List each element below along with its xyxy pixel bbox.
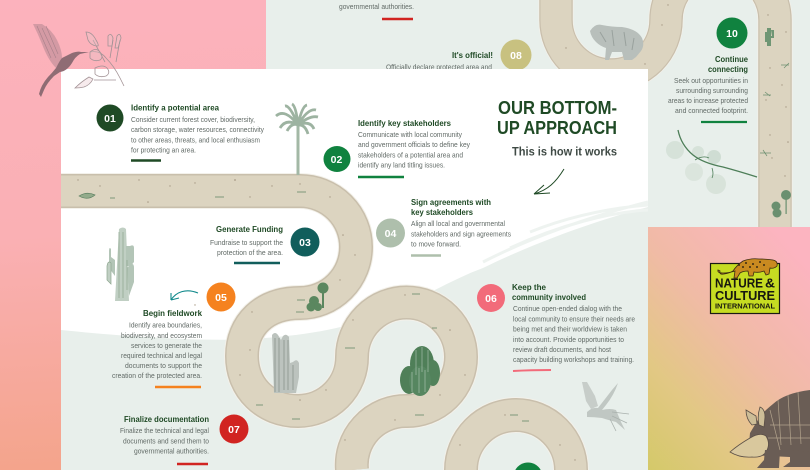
step 06: community involved xyxy=(512,293,586,302)
step 10: Seek out opportunities in xyxy=(674,76,748,85)
icon: small cactus on road xyxy=(765,28,774,46)
step 04 xyxy=(376,198,511,256)
icon: shrubs and tree xyxy=(306,282,328,312)
step 02: identify any land titling issues. xyxy=(358,160,445,170)
title xyxy=(498,101,616,134)
icon: flowers xyxy=(75,32,124,88)
step 10 xyxy=(668,18,749,122)
icon: hummingbird xyxy=(33,24,89,97)
subtitle: This is how it works xyxy=(512,146,617,158)
step 02: and government officials to define key xyxy=(358,140,470,149)
step 07 xyxy=(120,414,248,464)
step 06: Continue open-ended dialog with the xyxy=(513,304,622,313)
step 06: 06 xyxy=(485,293,497,305)
step 04: Align all local and governmental xyxy=(411,219,505,228)
winding road: back sheet xyxy=(556,0,789,228)
step 02: Identify key stakeholders xyxy=(358,119,452,128)
icon: flowering branch xyxy=(666,130,757,194)
icon: armadillo xyxy=(730,390,810,468)
arrow: to the road xyxy=(534,169,564,194)
step 05: Identify area boundaries, xyxy=(129,320,202,330)
step 03: 03 xyxy=(299,237,311,249)
step 05: documents to support the xyxy=(125,361,202,370)
step 07: documents and send them to xyxy=(123,436,209,446)
step 08: It's official! xyxy=(452,51,493,60)
step 07: 07 xyxy=(228,424,240,436)
step 01: to other areas, threats, and local enthusiasm xyxy=(131,135,260,144)
title: UP APPROACH xyxy=(497,118,617,138)
step 09 marker xyxy=(515,462,541,470)
step 05: 05 xyxy=(215,292,227,304)
step 10: and connected footprint. xyxy=(675,106,748,115)
step 10: connecting xyxy=(708,65,748,74)
step 02 xyxy=(324,119,470,177)
logo: Nature & Culture International: CULTURE xyxy=(715,288,775,303)
step 02: stakeholders of a potential area and xyxy=(358,150,463,160)
step 10: Continue xyxy=(715,55,749,64)
icon: shrubs and tree xyxy=(772,190,791,218)
step 03: protection of the area. xyxy=(217,248,283,257)
step 08 xyxy=(386,40,532,72)
road tufts xyxy=(79,192,529,421)
step 05: biodiversity, and ecosystem xyxy=(121,331,202,340)
step 07: governmental authorities. xyxy=(134,446,209,456)
step 04: Sign agreements with xyxy=(411,198,491,207)
step 02: Communicate with local community xyxy=(358,130,462,139)
panel: back sheet xyxy=(266,0,810,228)
step 04: to move forward. xyxy=(411,240,461,248)
step 10: surrounding surrounding xyxy=(676,86,748,95)
step 05: required technical and legal xyxy=(121,351,202,360)
panel: front sheet xyxy=(61,69,648,470)
step 06: capacity building workshops and training. xyxy=(513,355,634,364)
icon: palm tree xyxy=(276,104,318,175)
step 05: creation of the protected area. xyxy=(112,371,202,380)
step 01: carbon storage, water resources, connectivity xyxy=(131,125,264,134)
title: OUR BOTTOM- xyxy=(498,98,617,118)
step 08: Officially declare protected area and xyxy=(386,62,492,72)
icon: jaguar xyxy=(718,259,777,278)
step 03: Generate Funding xyxy=(216,225,283,234)
step 10: areas to increase protected xyxy=(668,96,748,105)
step 04: key stakeholders xyxy=(411,208,474,217)
icon: road tufts xyxy=(760,63,789,156)
icon: barrel cactus xyxy=(400,346,440,396)
step 10: 10 xyxy=(726,28,738,40)
step 05: Begin fieldwork xyxy=(143,309,203,318)
arrow: teal xyxy=(171,291,198,300)
step 06: into account. Provide opportunities to xyxy=(513,335,624,344)
icon: saguaro cactus xyxy=(107,228,134,301)
text: step 07 ending on back sheet: governmental authorities. xyxy=(339,2,414,11)
text: step 07 ending on back sheet xyxy=(339,2,414,19)
logo: Nature & Culture International: NATURE xyxy=(715,276,763,290)
logo: Nature & Culture International xyxy=(710,259,780,314)
icon: bear xyxy=(590,25,643,60)
step 05: services to generate the xyxy=(131,341,202,350)
icon: parrot xyxy=(582,382,629,431)
step 06: Keep the xyxy=(512,283,547,292)
step 01: 01 xyxy=(104,113,116,125)
step 01: for protecting an area. xyxy=(131,146,196,154)
step 03: Fundraise to support the xyxy=(210,238,283,247)
step 07: Finalize documentation xyxy=(124,415,209,424)
step 01 xyxy=(96,104,264,160)
step 04: 04 xyxy=(385,228,396,240)
step 06: local community to ensure their needs are xyxy=(513,314,635,324)
brush wave background xyxy=(61,202,648,470)
step 03 xyxy=(210,225,320,263)
step 08: 08 xyxy=(510,50,522,62)
step 02: 02 xyxy=(331,154,342,166)
step 06 xyxy=(477,283,635,371)
step 07: Finalize the technical and legal xyxy=(120,426,209,435)
step 01: Identify a potential area xyxy=(131,104,220,112)
winding road: front sheet xyxy=(61,179,576,470)
step 04: stakeholders and sign agreements xyxy=(411,230,511,238)
step 06: being met and their worldview is taken xyxy=(513,324,627,334)
step 01: Consider current forest cover, biodiversity, xyxy=(131,115,255,124)
step 05 xyxy=(112,282,236,387)
logo: Nature & Culture International: & xyxy=(765,276,775,290)
icon: tall cactus xyxy=(272,333,299,393)
step 06: review draft documents, and host xyxy=(513,345,611,354)
logo: Nature & Culture International: INTERNATIONAL xyxy=(715,302,775,310)
